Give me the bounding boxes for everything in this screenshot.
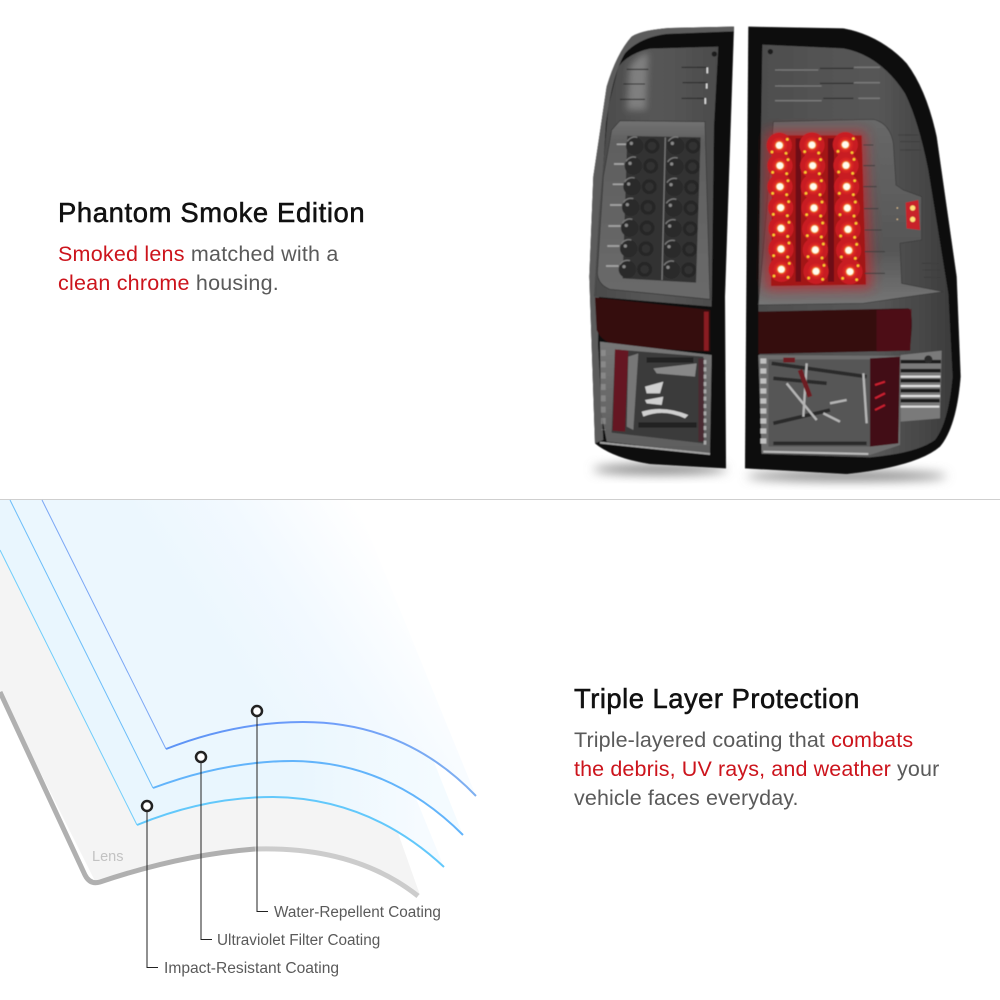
reverse lamp [600, 342, 712, 454]
red LED array [765, 132, 885, 290]
text: triple layer description: Triple-layered coating that combats [574, 728, 913, 752]
LED panel [606, 136, 701, 283]
heading: Phantom Smoke Edition: Phantom Smoke Edition [58, 197, 365, 228]
divider [0, 499, 1000, 500]
smoked body [589, 27, 734, 443]
text: triple layer description: vehicle faces everyday. [574, 786, 799, 810]
ground shadow [747, 471, 947, 481]
text: smoke edition description [58, 242, 339, 295]
LED surround [758, 119, 943, 305]
ground shadow [593, 465, 727, 474]
amber band [595, 297, 710, 352]
coating layer: impact-resistant [0, 500, 444, 867]
callout: impact-resistant coating [142, 801, 339, 977]
LED surround [597, 121, 710, 299]
side marker LED [896, 200, 920, 230]
text: triple layer description [574, 728, 939, 810]
callout: water-repellent coating: Water-Repellent Coating [274, 904, 441, 921]
lens label: Lens [92, 849, 123, 865]
coating layer: ultraviolet filter [10, 500, 463, 835]
text: triple layer description: the debris, UV rays, and weather your [574, 757, 939, 781]
callout: impact-resistant coating: Impact-Resistant Coating [164, 960, 339, 977]
housing [745, 27, 961, 474]
heading: Triple Layer Protection: Triple Layer Protection [574, 683, 860, 714]
side ribs [898, 135, 941, 277]
smoked body [758, 45, 953, 457]
reverse lamp [758, 355, 901, 455]
top ribs [620, 67, 707, 99]
tail light: left (off) [589, 27, 734, 474]
side chrome slats [901, 351, 942, 422]
callout: ultraviolet filter coating: Ultraviolet Filter Coating [217, 932, 380, 949]
top highlight [627, 53, 648, 110]
callout: water-repellent coating [252, 706, 441, 921]
coating layer: water-repellent [42, 500, 476, 796]
housing [589, 27, 734, 468]
tail light: right (lit) [745, 27, 961, 481]
amber band [758, 308, 912, 354]
callout: ultraviolet filter coating [196, 752, 380, 949]
text: smoke edition description: clean chrome housing. [58, 271, 279, 295]
lens layer [0, 500, 420, 896]
text: smoke edition description: Smoked lens matched with a [58, 242, 339, 266]
top ribs [820, 68, 853, 98]
